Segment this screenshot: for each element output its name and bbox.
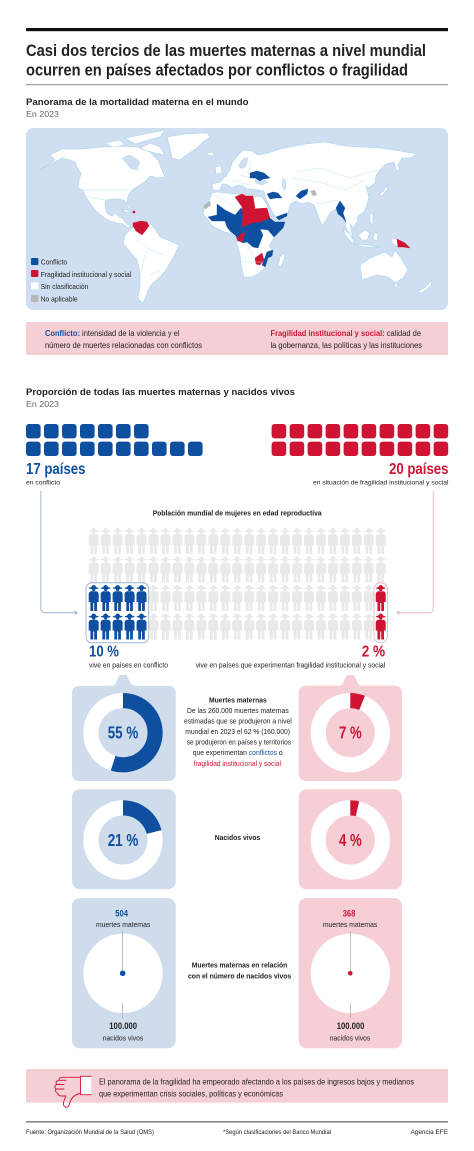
pictogram title: Población mundial de mujeres en edad reproductiva: [153, 508, 322, 518]
map: fragility countries: [133, 194, 410, 265]
card: live births conflict 21%: [72, 789, 176, 889]
footer: [26, 1129, 448, 1136]
footer: *Según clasificaciones del Banco Mundial: [223, 1129, 331, 1136]
pictogram: world population of women: [86, 528, 387, 643]
label: 2 percent: [196, 644, 386, 670]
label: deaths relative to births: con el número de nacidos vivos: [188, 972, 291, 980]
label: 20 countries: [313, 461, 449, 486]
title: [26, 42, 426, 80]
arrow: fragility to population: [397, 491, 433, 615]
card: deaths ratio conflict: muertes maternas: [96, 920, 151, 929]
text: maternal deaths explanation: se produjeron en países y territorios: [187, 738, 291, 747]
text: maternal deaths explanation: fragilidad institucional y social: [194, 759, 281, 768]
label: 17 countries: en conflicto: [26, 480, 60, 486]
card: maternal deaths conflict 55%: 55 %: [108, 723, 139, 743]
label: 10 percent: 10 %: [89, 644, 119, 661]
heading: map section: En 2023: [26, 109, 59, 119]
arrow: conflict to population: [41, 491, 77, 615]
map: conflict countries: [208, 171, 346, 267]
label: 10 percent: [89, 644, 168, 670]
definition: fragility: Fragilidad institucional y social: calidad de: [270, 329, 421, 338]
map legend: No aplicable: [41, 295, 78, 303]
card: deaths ratio conflict: [72, 898, 176, 1048]
panel: definitions: [26, 322, 448, 355]
definition: fragility: [270, 329, 422, 350]
panel: closing note: El panorama de la fragilidad ha empeorado afectando a los países de ingresos bajos y medianos: [99, 1076, 414, 1086]
panel: closing note: que experimentan crisis sociales, políticas y económicas: [99, 1088, 283, 1098]
text: maternal deaths explanation: que experimentan conflictos o: [193, 748, 283, 757]
country squares: conflict: [26, 424, 203, 456]
heading: proportion section: En 2023: [26, 399, 59, 409]
map legend: Sin clasificación: [41, 283, 88, 291]
label: live births: Nacidos vivos: [215, 833, 260, 842]
map legend: Conflicto: [41, 258, 67, 266]
title: Casi dos tercios de las muertes maternas a nivel mundial: [26, 42, 426, 60]
heading: map section: [26, 97, 249, 119]
label: 17 countries: [26, 461, 86, 486]
definition: fragility: la gobernanza, las políticas y las instituciones: [270, 341, 422, 350]
heading: proportion section: Proporción de todas las muertes maternas y nacidos vivos: [26, 387, 295, 397]
panel: world map: [26, 128, 448, 310]
label: deaths relative to births: [188, 960, 291, 980]
card: deaths ratio fragility: 100.000: [337, 1021, 364, 1032]
footer: Agencia EFE: [410, 1129, 448, 1136]
text: maternal deaths explanation: [184, 696, 292, 768]
footer: Fuente: Organización Mundial de la Salud (OMS): [26, 1129, 154, 1136]
definition: conflict: [45, 329, 202, 350]
label: 20 countries: 20 países: [389, 461, 449, 478]
panel: closing note: [26, 1069, 448, 1107]
card: deaths ratio fragility: nacidos vivos: [330, 1033, 371, 1042]
card: deaths ratio conflict: 504: [115, 909, 129, 920]
card: deaths ratio fragility: [299, 898, 402, 1048]
text: maternal deaths explanation: De las 260.000 muertes maternas: [187, 706, 289, 715]
top rule: [26, 28, 448, 31]
text: maternal deaths explanation: mundial en 2023 el 62 % (160.000): [185, 727, 290, 736]
country squares: fragility: [272, 424, 448, 456]
card: live births fragility 4%: [299, 789, 402, 889]
text: maternal deaths explanation: Muertes maternas: [209, 696, 267, 704]
label: 2 percent: vive en países que experimentan fragilidad institucional y social: [196, 662, 386, 670]
label: 20 countries: en situación de fragilidad institucional y social: [313, 480, 449, 486]
title: ocurren en países afectados por conflictos o fragilidad: [26, 62, 408, 80]
card: live births fragility 4%: 4 %: [339, 830, 362, 850]
label: 10 percent: vive en países en conflicto: [89, 662, 168, 670]
label: deaths relative to births: Muertes maternas en relación: [192, 960, 288, 970]
icon: thumbs down: [55, 1076, 91, 1107]
map: gray not applicable: [203, 190, 317, 209]
card: maternal deaths fragility 7%: [299, 675, 402, 781]
card: maternal deaths fragility 7%: 7 %: [339, 723, 362, 743]
label: 2 percent: 2 %: [362, 644, 385, 661]
card: deaths ratio conflict: 100.000: [109, 1021, 137, 1032]
heading: map section: Panorama de la mortalidad materna en el mundo: [26, 97, 249, 107]
definition: conflict: Conflicto: intensidad de la violencia y el: [45, 329, 180, 338]
heading: proportion section: [26, 387, 295, 409]
gray figures: [89, 528, 386, 640]
map legend: Fragilidad institucional y social: [41, 271, 132, 279]
card: deaths ratio fragility: 368: [343, 909, 355, 920]
map legend: [31, 258, 132, 303]
map: interior borders: [84, 160, 378, 277]
card: deaths ratio fragility: muertes maternas: [323, 920, 378, 929]
map: land masses: [41, 130, 432, 303]
card: live births conflict 21%: 21 %: [108, 830, 139, 850]
label: 17 countries: 17 países: [26, 461, 86, 478]
definition: conflict: número de muertes relacionadas con conflictos: [45, 341, 202, 350]
card: maternal deaths conflict 55%: [72, 675, 176, 781]
frame and figures: conflict 10%: [86, 583, 149, 643]
frame and figures: fragility 2%: [374, 583, 387, 643]
card: deaths ratio conflict: nacidos vivos: [103, 1033, 144, 1042]
text: maternal deaths explanation: estimadas que se produjeron a nivel: [184, 716, 292, 725]
